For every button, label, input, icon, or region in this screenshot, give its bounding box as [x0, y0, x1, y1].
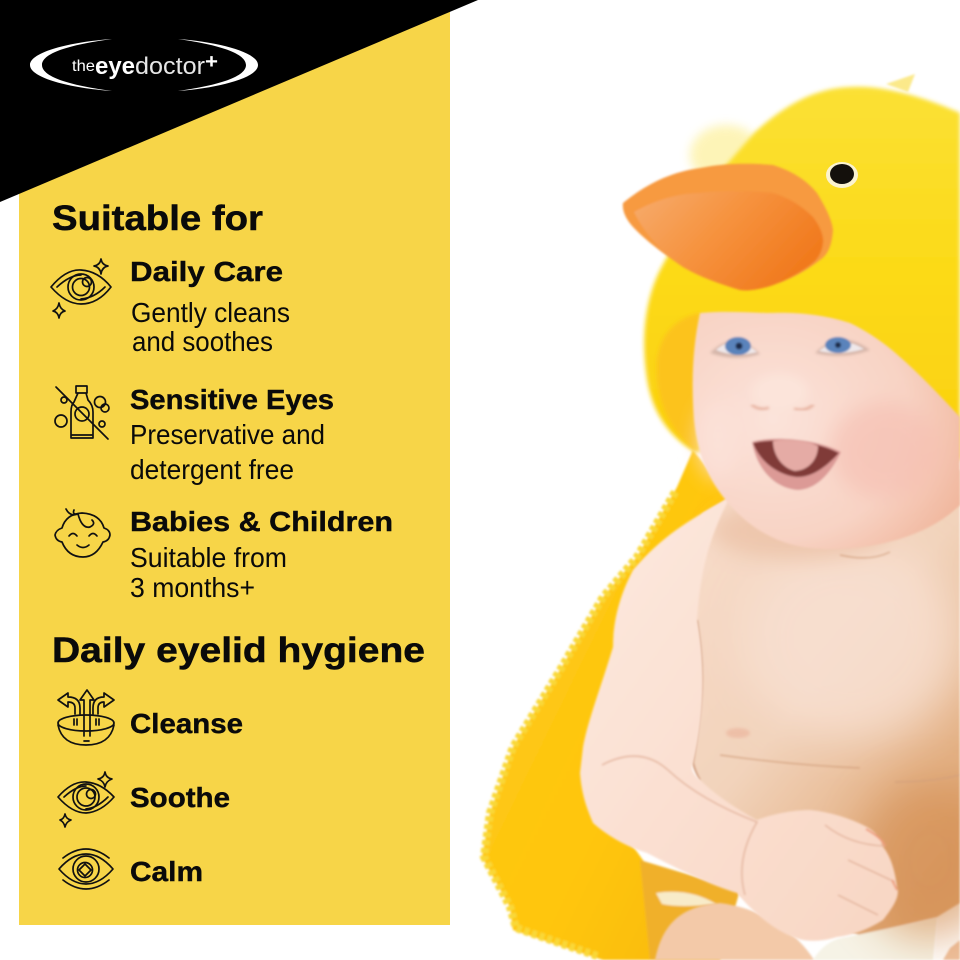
description: and soothes [132, 326, 273, 357]
item: Calm [59, 849, 203, 889]
icon: sparkling eye [51, 259, 111, 318]
black corner banner [0, 0, 478, 202]
label: Sensitive Eyes [130, 384, 334, 415]
duck eye [826, 162, 858, 188]
label: Soothe [130, 782, 230, 813]
logo: the [72, 58, 95, 75]
logo: eye [95, 53, 135, 80]
mouth [752, 439, 841, 490]
towel behind baby [482, 450, 740, 960]
item: Babies & Children [55, 506, 393, 603]
logo: + [205, 51, 218, 73]
nose [752, 374, 813, 410]
item: Daily Care [51, 256, 290, 357]
baby arm and hand [580, 497, 898, 941]
description: 3 months+ [130, 572, 255, 603]
icon: sparkling eye [58, 772, 114, 827]
description: Gently cleans [131, 297, 290, 328]
description: detergent free [130, 454, 294, 485]
baby photo illustration [482, 74, 960, 960]
label: Daily Care [130, 256, 283, 287]
heading: Daily eyelid hygiene: Daily eyelid hygiene [52, 631, 425, 670]
logo [30, 39, 258, 91]
hood [644, 74, 960, 460]
description: Suitable from [130, 542, 287, 573]
duck beak [623, 164, 833, 290]
yellow panel [19, 8, 450, 925]
icon: baby face [55, 509, 110, 557]
item: Sensitive Eyes [55, 384, 334, 485]
icon: bowl with arrows [58, 690, 114, 745]
eye: left [710, 337, 760, 358]
description: Preservative and [130, 419, 325, 450]
icon: crossed out bottle [55, 386, 109, 439]
label: Cleanse [130, 708, 243, 739]
item: Soothe [58, 772, 230, 827]
heading: Suitable for: Suitable for [52, 199, 263, 238]
eye: right [815, 337, 870, 356]
label: Calm [130, 856, 203, 887]
logo: doctor [135, 53, 205, 80]
label: Babies & Children [130, 506, 393, 537]
baby torso, leg and nappy [640, 470, 960, 960]
item: Cleanse [58, 690, 243, 745]
icon: eye with diamond iris [59, 849, 113, 889]
baby face [693, 312, 960, 549]
